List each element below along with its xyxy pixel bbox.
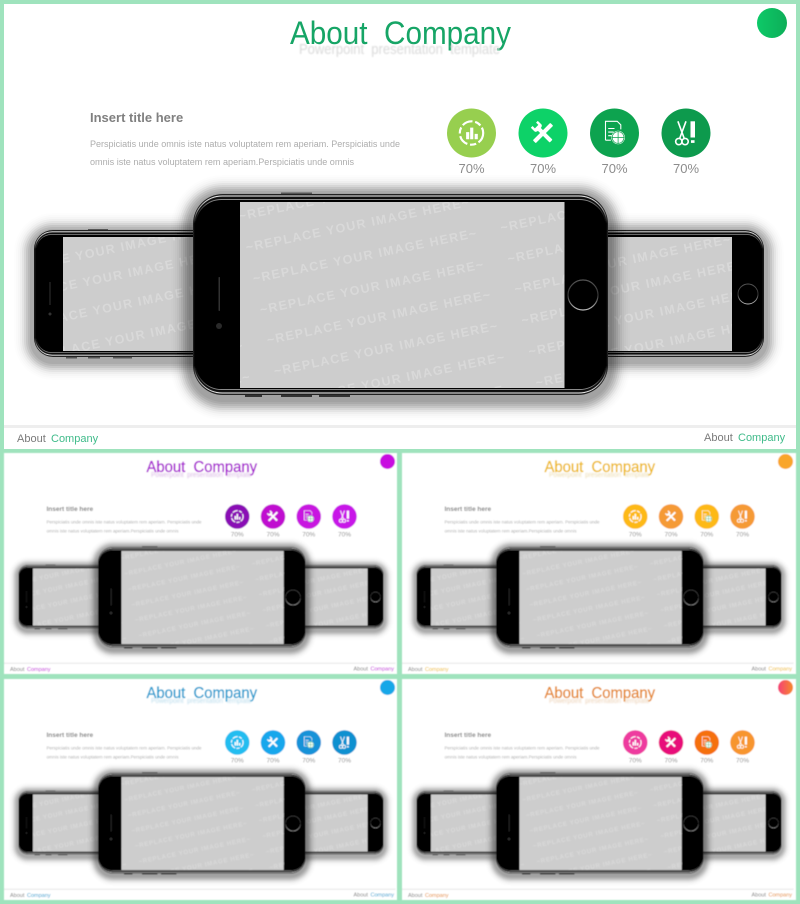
footer blue: Company <box>370 892 394 898</box>
icons yellow: 70% <box>700 532 713 538</box>
text block purple <box>46 506 202 534</box>
phones blue: ~REPLACE YOUR IMAGE HERE~ <box>7 814 121 844</box>
subtitle purple: Powerpoint presentation template <box>151 470 252 479</box>
phones blue: ~REPLACE YOUR IMAGE HERE~ <box>261 805 375 835</box>
footer purple: Company <box>27 667 51 673</box>
text block orange: Perspiciatis unde omnis iste natus voluptatem rem aperiam. Perspiciatis unde <box>444 746 600 750</box>
text block blue: Perspiciatis unde omnis iste natus voluptatem rem aperiam. Perspiciatis unde <box>46 746 202 750</box>
footer yellow: About <box>752 666 766 672</box>
phones orange <box>409 766 789 884</box>
icons orange: 70% <box>664 758 678 764</box>
side phones: ~REPLACE YOUR IMAGE HERE~ <box>519 257 746 317</box>
phones purple: ~REPLACE YOUR IMAGE HERE~ <box>2 574 116 603</box>
slide: blue <box>0 679 397 904</box>
phones blue: ~REPLACE YOUR IMAGE HERE~ <box>13 829 127 859</box>
phones orange: ~REPLACE YOUR IMAGE HERE~ ~REPLACE YOUR IMAGE HERE~ ~REPLACE YOUR IMAGE HERE~ <box>398 749 759 829</box>
footer orange: About <box>752 892 766 898</box>
phones purple: ~REPLACE YOUR IMAGE HERE~ ~REPLACE YOUR IMAGE HERE~ ~REPLACE YOUR IMAGE HERE~ <box>14 584 375 665</box>
phones orange: ~REPLACE YOUR IMAGE HERE~ <box>671 834 785 864</box>
phones yellow: ~REPLACE YOUR IMAGE HERE~ ~REPLACE YOUR IMAGE HERE~ ~REPLACE YOUR IMAGE HERE~ <box>409 569 770 650</box>
subtitle yellow: Powerpoint presentation template <box>549 470 650 479</box>
phones purple: ~REPLACE YOUR IMAGE HERE~ <box>254 567 368 596</box>
phones blue: ~REPLACE YOUR IMAGE HERE~ <box>2 800 116 829</box>
phones yellow <box>409 540 789 658</box>
phones orange: ~REPLACE YOUR IMAGE HERE~ <box>400 800 514 829</box>
icon: document globe: 70% <box>601 161 628 176</box>
footer purple: About <box>354 666 368 672</box>
title: About Company <box>290 15 511 51</box>
phones yellow: ~REPLACE YOUR IMAGE HERE~ <box>659 579 773 609</box>
phones purple: ~REPLACE YOUR IMAGE HERE~ <box>261 579 375 609</box>
phones yellow: ~REPLACE YOUR IMAGE HERE~ ~REPLACE YOUR IMAGE HERE~ ~REPLACE YOUR IMAGE HERE~ <box>395 507 756 588</box>
phones yellow: ~REPLACE YOUR IMAGE HERE~ <box>671 608 785 638</box>
phones orange: ~REPLACE YOUR IMAGE HERE~ <box>411 829 525 859</box>
corner circle blue <box>380 680 395 695</box>
side phones: ~REPLACE YOUR IMAGE HERE~ <box>0 220 221 280</box>
text block orange: Insert title here <box>444 732 491 739</box>
footer blue: About <box>10 893 25 899</box>
main phone: ~REPLACE YOUR IMAGE HERE~ ~REPLACE YOUR IMAGE HERE~ ~REPLACE YOUR IMAGE HERE~ <box>39 330 761 492</box>
text block blue: omnis iste natus voluptatem rem aperiam.Perspiciatis unde omnis <box>46 754 179 760</box>
phones purple: ~REPLACE YOUR IMAGE HERE~ ~REPLACE YOUR IMAGE HERE~ ~REPLACE YOUR IMAGE HERE~ <box>4 538 365 619</box>
main phone: ~REPLACE YOUR IMAGE HERE~ ~REPLACE YOUR IMAGE HERE~ ~REPLACE YOUR IMAGE HERE~ <box>25 268 747 429</box>
icon: tools <box>518 108 568 176</box>
icons purple: 70% <box>302 532 315 538</box>
phones yellow: ~REPLACE YOUR IMAGE HERE~ ~REPLACE YOUR IMAGE HERE~ ~REPLACE YOUR IMAGE HERE~ <box>402 538 763 619</box>
phones orange: ~REPLACE YOUR IMAGE HERE~ <box>405 814 519 844</box>
icons purple: 70% <box>266 532 280 538</box>
main phone: ~REPLACE YOUR IMAGE HERE~ ~REPLACE YOUR IMAGE HERE~ ~REPLACE YOUR IMAGE HERE~ <box>0 144 719 305</box>
footer blue: Company <box>27 893 51 899</box>
side phones <box>0 213 784 380</box>
footer left <box>17 433 99 445</box>
icons orange: 70% <box>736 758 749 764</box>
footer right: Company <box>738 432 786 444</box>
phones orange: ~REPLACE YOUR IMAGE HERE~ ~REPLACE YOUR IMAGE HERE~ ~REPLACE YOUR IMAGE HERE~ <box>405 780 766 860</box>
phones blue: ~REPLACE YOUR IMAGE HERE~ ~REPLACE YOUR IMAGE HERE~ ~REPLACE YOUR IMAGE HERE~ <box>0 733 358 814</box>
main phone <box>175 179 626 416</box>
icon: chart: 70% <box>458 161 485 176</box>
phones purple <box>11 540 391 658</box>
text block body <box>90 139 400 167</box>
phones orange: ~REPLACE YOUR IMAGE HERE~ <box>396 787 510 816</box>
icons blue: 70% <box>302 758 315 764</box>
icons yellow <box>623 504 755 538</box>
footer purple <box>10 666 394 673</box>
phones blue: ~REPLACE YOUR IMAGE HERE~ <box>254 793 368 822</box>
icon: scissors <box>662 108 710 176</box>
side phones: ~REPLACE YOUR IMAGE HERE~ <box>543 314 770 374</box>
title blue: About Company <box>146 685 257 702</box>
main phone: ~REPLACE YOUR IMAGE HERE~ ~REPLACE YOUR IMAGE HERE~ ~REPLACE YOUR IMAGE HERE~ <box>11 206 733 368</box>
phones blue <box>11 766 391 884</box>
text block body: Perspiciatis unde omnis iste natus voluptatem rem aperiam. Perspiciatis unde <box>90 139 400 149</box>
text block yellow: omnis iste natus voluptatem rem aperiam.Perspiciatis unde omnis <box>444 528 577 534</box>
text block purple: omnis iste natus voluptatem rem aperiam.Perspiciatis unde omnis <box>46 528 179 534</box>
title orange: About Company <box>544 685 655 702</box>
phones yellow: ~REPLACE YOUR IMAGE HERE~ <box>411 603 525 633</box>
footer orange: About <box>408 893 423 899</box>
phones yellow: ~REPLACE YOUR IMAGE HERE~ <box>400 574 514 603</box>
phones blue: ~REPLACE YOUR IMAGE HERE~ ~REPLACE YOUR IMAGE HERE~ ~REPLACE YOUR IMAGE HERE~ <box>4 764 365 845</box>
phones orange: ~REPLACE YOUR IMAGE HERE~ <box>666 819 780 849</box>
footer yellow: Company <box>425 667 449 673</box>
text block orange <box>444 732 600 760</box>
phones yellow: ~REPLACE YOUR IMAGE HERE~ <box>396 561 510 590</box>
footer orange <box>408 892 792 899</box>
slide: orange <box>395 679 796 904</box>
text block body: omnis iste natus voluptatem rem aperiam.Perspiciatis unde omnis <box>90 157 354 167</box>
icons orange: 70% <box>629 758 642 764</box>
phones purple: ~REPLACE YOUR IMAGE HERE~ ~REPLACE YOUR IMAGE HERE~ ~REPLACE YOUR IMAGE HERE~ <box>0 507 358 588</box>
slide: yellow <box>402 452 796 674</box>
icon: document globe <box>590 108 639 176</box>
footer yellow: About <box>408 667 423 673</box>
side phones: ~REPLACE YOUR IMAGE HERE~ <box>11 275 238 335</box>
phones yellow: ~REPLACE YOUR IMAGE HERE~ <box>652 567 766 596</box>
text block orange: omnis iste natus voluptatem rem aperiam.Perspiciatis unde omnis <box>444 754 577 760</box>
phones yellow: ~REPLACE YOUR IMAGE HERE~ ~REPLACE YOUR IMAGE HERE~ ~REPLACE YOUR IMAGE HERE~ <box>405 554 766 634</box>
icons orange <box>623 730 755 764</box>
side phones: ~REPLACE YOUR IMAGE HERE~ <box>1 246 228 306</box>
phones purple: ~REPLACE YOUR IMAGE HERE~ <box>13 603 127 633</box>
icon: tools: 70% <box>530 161 556 176</box>
text block purple: Perspiciatis unde omnis iste natus voluptatem rem aperiam. Perspiciatis unde <box>46 520 202 524</box>
icons yellow: 70% <box>664 532 678 538</box>
text block blue: Insert title here <box>46 732 93 739</box>
phones orange: ~REPLACE YOUR IMAGE HERE~ <box>659 805 773 835</box>
side phones: ~REPLACE YOUR IMAGE HERE~ <box>506 232 733 292</box>
subtitle orange: Powerpoint presentation template <box>549 696 650 705</box>
phones yellow: ~REPLACE YOUR IMAGE HERE~ <box>405 588 519 618</box>
footer yellow <box>408 666 792 673</box>
phones yellow: ~REPLACE YOUR IMAGE HERE~ ~REPLACE YOUR IMAGE HERE~ ~REPLACE YOUR IMAGE HERE~ <box>412 584 773 665</box>
icons yellow: 70% <box>629 532 642 538</box>
icons blue: 70% <box>231 758 244 764</box>
footer orange: Company <box>425 893 449 899</box>
text block yellow: Perspiciatis unde omnis iste natus voluptatem rem aperiam. Perspiciatis unde <box>444 520 600 524</box>
icons orange: 70% <box>700 758 713 764</box>
text block heading: Insert title here <box>90 110 183 125</box>
footer left: Company <box>51 433 99 445</box>
slide: main green <box>0 4 796 493</box>
phones yellow: ~REPLACE YOUR IMAGE HERE~ ~REPLACE YOUR IMAGE HERE~ ~REPLACE YOUR IMAGE HERE~ <box>416 600 777 681</box>
icon: scissors: 70% <box>673 161 699 176</box>
phones orange: ~REPLACE YOUR IMAGE HERE~ ~REPLACE YOUR IMAGE HERE~ ~REPLACE YOUR IMAGE HERE~ <box>412 810 773 891</box>
footer orange: Company <box>768 892 792 898</box>
title purple: About Company <box>146 459 257 476</box>
main phone: ~REPLACE YOUR IMAGE HERE~ ~REPLACE YOUR IMAGE HERE~ ~REPLACE YOUR IMAGE HERE~ <box>18 237 740 398</box>
text block blue <box>46 732 202 760</box>
icon: chart <box>447 108 496 176</box>
main phone: ~REPLACE YOUR IMAGE HERE~ ~REPLACE YOUR IMAGE HERE~ ~REPLACE YOUR IMAGE HERE~ <box>4 175 726 337</box>
phones purple: ~REPLACE YOUR IMAGE HERE~ ~REPLACE YOUR IMAGE HERE~ ~REPLACE YOUR IMAGE HERE~ <box>11 569 372 650</box>
phones purple: ~REPLACE YOUR IMAGE HERE~ ~REPLACE YOUR IMAGE HERE~ ~REPLACE YOUR IMAGE HERE~ <box>18 600 379 681</box>
phones blue: ~REPLACE YOUR IMAGE HERE~ <box>0 787 112 816</box>
phones orange: ~REPLACE YOUR IMAGE HERE~ ~REPLACE YOUR IMAGE HERE~ ~REPLACE YOUR IMAGE HERE~ <box>402 764 763 845</box>
footer right: About <box>704 432 733 444</box>
phones blue: ~REPLACE YOUR IMAGE HERE~ ~REPLACE YOUR IMAGE HERE~ ~REPLACE YOUR IMAGE HERE~ <box>7 780 368 860</box>
icons purple: 70% <box>231 532 244 538</box>
icons blue: 70% <box>266 758 280 764</box>
subtitle blue: Powerpoint presentation template <box>151 696 252 705</box>
text block yellow <box>444 506 600 534</box>
phones purple: ~REPLACE YOUR IMAGE HERE~ ~REPLACE YOUR IMAGE HERE~ ~REPLACE YOUR IMAGE HERE~ <box>0 523 361 603</box>
phones blue: ~REPLACE YOUR IMAGE HERE~ <box>268 819 382 849</box>
side phones: ~REPLACE YOUR IMAGE HERE~ <box>533 285 760 345</box>
text block purple: Insert title here <box>46 506 93 513</box>
phones yellow: ~REPLACE YOUR IMAGE HERE~ ~REPLACE YOUR IMAGE HERE~ ~REPLACE YOUR IMAGE HERE~ <box>419 616 780 696</box>
icons purple <box>225 504 357 538</box>
phones purple: ~REPLACE YOUR IMAGE HERE~ <box>0 561 112 590</box>
phones blue: ~REPLACE YOUR IMAGE HERE~ <box>273 834 387 864</box>
footer blue: About <box>354 892 368 898</box>
phones orange: ~REPLACE YOUR IMAGE HERE~ <box>652 793 766 822</box>
icons purple: 70% <box>338 532 351 538</box>
phones purple: ~REPLACE YOUR IMAGE HERE~ <box>7 588 121 618</box>
title yellow: About Company <box>544 459 655 476</box>
slide: purple <box>0 453 397 697</box>
footer yellow: Company <box>768 666 792 672</box>
phones purple: ~REPLACE YOUR IMAGE HERE~ ~REPLACE YOUR IMAGE HERE~ ~REPLACE YOUR IMAGE HERE~ <box>7 554 368 634</box>
phones purple: ~REPLACE YOUR IMAGE HERE~ ~REPLACE YOUR IMAGE HERE~ ~REPLACE YOUR IMAGE HERE~ <box>21 616 382 696</box>
corner circle yellow <box>778 454 793 469</box>
corner circle <box>757 8 787 38</box>
footer left: About <box>17 433 46 445</box>
footer purple: About <box>10 667 25 673</box>
phones purple: ~REPLACE YOUR IMAGE HERE~ <box>273 608 387 638</box>
icons blue <box>225 730 357 764</box>
phones purple: ~REPLACE YOUR IMAGE HERE~ <box>268 593 382 623</box>
footer right <box>704 432 786 444</box>
phones yellow: ~REPLACE YOUR IMAGE HERE~ <box>666 593 780 623</box>
phones orange: ~REPLACE YOUR IMAGE HERE~ ~REPLACE YOUR IMAGE HERE~ ~REPLACE YOUR IMAGE HERE~ <box>395 733 756 814</box>
icons blue: 70% <box>338 758 351 764</box>
corner circle orange <box>778 680 793 695</box>
phones orange: ~REPLACE YOUR IMAGE HERE~ ~REPLACE YOUR IMAGE HERE~ ~REPLACE YOUR IMAGE HERE~ <box>409 795 770 876</box>
main phone: ~REPLACE YOUR IMAGE HERE~ ~REPLACE YOUR IMAGE HERE~ ~REPLACE YOUR IMAGE HERE~ <box>32 299 754 461</box>
footer purple: Company <box>370 666 394 672</box>
phones blue: ~REPLACE YOUR IMAGE HERE~ ~REPLACE YOUR IMAGE HERE~ ~REPLACE YOUR IMAGE HERE~ <box>0 749 361 829</box>
phones blue: ~REPLACE YOUR IMAGE HERE~ ~REPLACE YOUR IMAGE HERE~ ~REPLACE YOUR IMAGE HERE~ <box>11 795 372 876</box>
text block yellow: Insert title here <box>444 506 491 513</box>
side phones: ~REPLACE YOUR IMAGE HERE~ <box>24 306 251 366</box>
icons yellow: 70% <box>736 532 749 538</box>
footer blue <box>10 892 394 899</box>
main phone: ~REPLACE YOUR IMAGE HERE~ ~REPLACE YOUR IMAGE HERE~ ~REPLACE YOUR IMAGE HERE~ <box>0 113 712 274</box>
phones yellow: ~REPLACE YOUR IMAGE HERE~ ~REPLACE YOUR IMAGE HERE~ ~REPLACE YOUR IMAGE HERE~ <box>398 523 759 603</box>
subtitle: Powerpoint presentation template <box>299 41 500 58</box>
corner circle purple <box>380 454 395 469</box>
phones blue: ~REPLACE YOUR IMAGE HERE~ ~REPLACE YOUR IMAGE HERE~ ~REPLACE YOUR IMAGE HERE~ <box>14 810 375 891</box>
